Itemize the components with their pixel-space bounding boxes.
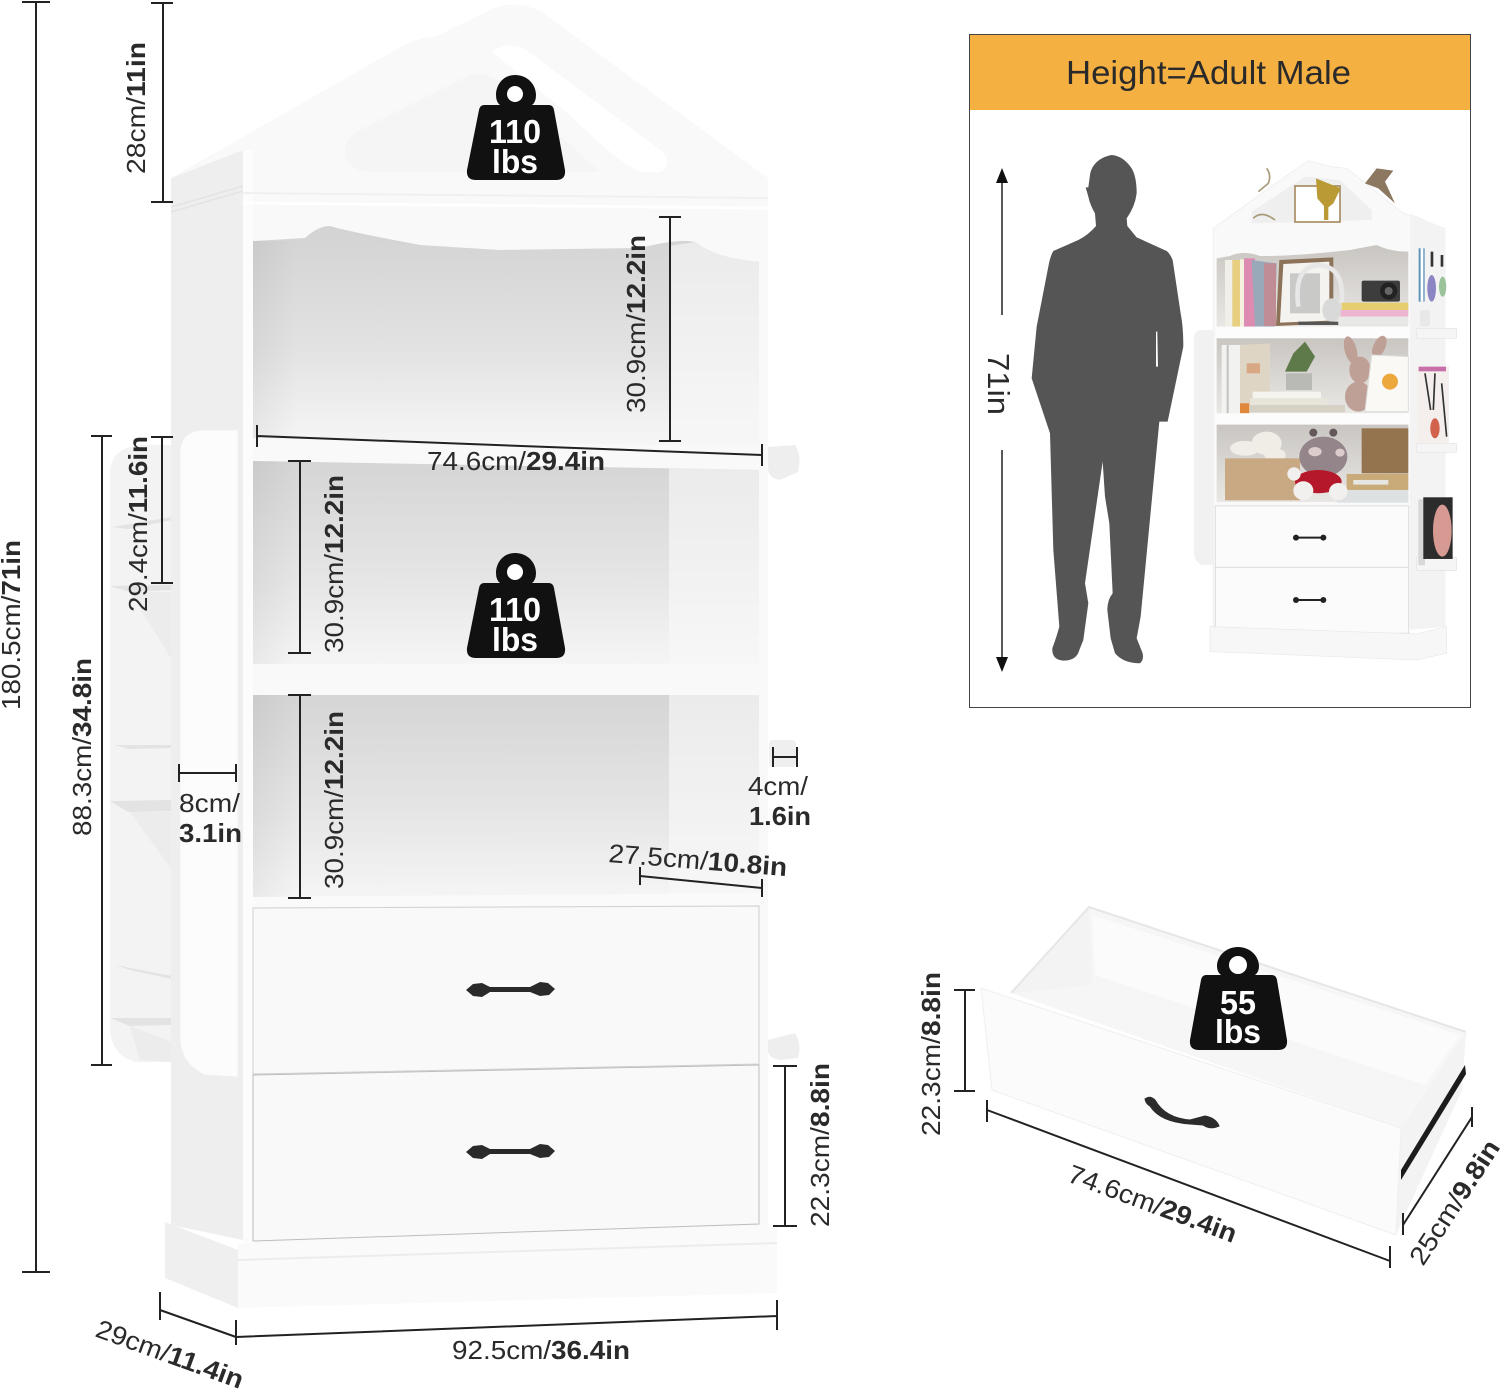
weight badge: 110 lbs shelf: 110 bbox=[489, 591, 541, 628]
dimension: drawer depth: 25cm/9.8in bbox=[1403, 1134, 1500, 1270]
height arrow bbox=[996, 168, 1008, 672]
mini cabinet body bbox=[1213, 161, 1445, 627]
dimension: side panel height bbox=[67, 436, 112, 1065]
right side ledge middle bbox=[769, 740, 796, 767]
dimension: overall width: 92.5cm/ 36.4in bbox=[452, 1335, 630, 1365]
dimension: middle shelf height bbox=[288, 461, 349, 653]
drawer right side bbox=[1396, 1032, 1466, 1235]
mini upper drawer bbox=[1215, 506, 1409, 570]
lower shelf bottom board bbox=[253, 893, 759, 907]
front of cabinet with roof bbox=[171, 4, 768, 1248]
mini bunny toy bbox=[1341, 334, 1390, 412]
mini photo frame bbox=[1276, 257, 1333, 326]
weight badge: 110 lbs shelf: lbs bbox=[492, 621, 538, 658]
dimension: side compartment height: 29.4cm/11.6in bbox=[123, 436, 153, 612]
mini shelf two bbox=[1216, 413, 1410, 424]
mini side record bbox=[1418, 497, 1453, 565]
mini base bbox=[1210, 627, 1447, 660]
mini potted plant bbox=[1285, 342, 1315, 390]
lower shelf opening bbox=[253, 695, 759, 897]
mini camera bbox=[1362, 281, 1400, 302]
weight badge: 55 lbs: 55 bbox=[1220, 984, 1256, 1021]
dimension: drawer width: 74.6cm/29.4in bbox=[1064, 1159, 1241, 1249]
mini headphones bbox=[1297, 265, 1342, 325]
middle shelf opening bbox=[253, 461, 759, 664]
mini book stack bbox=[1338, 303, 1408, 324]
panel frame bbox=[970, 34, 1470, 708]
panel: height comparison bbox=[970, 34, 1470, 708]
top opening right wall bbox=[669, 242, 759, 447]
mini hippo toy bbox=[1287, 429, 1348, 500]
drawer interior bbox=[1011, 907, 1466, 1128]
middle opening right wall bbox=[669, 468, 759, 664]
weight badge: 110 lbs shelf bbox=[467, 553, 565, 658]
mini side art book bbox=[1417, 367, 1449, 443]
roof window bbox=[492, 45, 667, 172]
mini woven basket bbox=[1225, 458, 1300, 500]
dimension: drawer height bbox=[773, 1063, 835, 1227]
drawer slide rail bbox=[1401, 1065, 1466, 1180]
mini shelf one bbox=[1216, 327, 1410, 338]
upper drawer handle bbox=[466, 982, 555, 997]
mini star ornament bbox=[1365, 168, 1395, 203]
dimension: overall width bbox=[236, 1300, 777, 1365]
drawer handle bbox=[1145, 1097, 1219, 1128]
upper drawer bbox=[253, 906, 759, 1074]
mini top opening bbox=[1217, 245, 1408, 327]
dimension: drawer height: 22.3cm/8.8in bbox=[916, 972, 946, 1136]
dimension: lower shelf height: 30.9cm/12.2in bbox=[319, 711, 349, 889]
mini brown box bbox=[1362, 428, 1408, 473]
dimension: side panel depth bbox=[179, 764, 242, 848]
mini roof opening bbox=[1252, 177, 1372, 223]
mini books bbox=[1225, 258, 1277, 327]
left side organizer panel bbox=[110, 445, 182, 1062]
pull-out side panel bbox=[180, 430, 238, 1077]
dimension: drawer height: 22.3cm/8.8in bbox=[805, 1063, 835, 1227]
mini lower drawer bbox=[1215, 567, 1409, 633]
dimension: middle shelf height: 30.9cm/12.2in bbox=[319, 475, 349, 653]
dimension: side panel depth: 8cm/ bbox=[179, 788, 241, 818]
open drawer bbox=[981, 907, 1466, 1235]
lower drawer bbox=[253, 1065, 759, 1241]
dimension: side compartment height bbox=[123, 436, 173, 612]
dimension: drawer width bbox=[987, 1100, 1390, 1268]
weight badge: 55 lbs bbox=[1190, 947, 1287, 1050]
dimension: side panel depth: 3.1in bbox=[179, 818, 242, 848]
lower drawer handle bbox=[466, 1144, 555, 1159]
dimension: shelf width bbox=[257, 425, 762, 476]
mini right ledges bbox=[1417, 328, 1457, 571]
side of cabinet bbox=[171, 150, 243, 1240]
dimension: roof height: 28cm/11in bbox=[121, 42, 151, 174]
mini art frame bbox=[1365, 355, 1408, 412]
mini trophy and photo frame bbox=[1295, 178, 1341, 222]
mini lower handle bbox=[1293, 597, 1326, 603]
mini paper stack bbox=[1250, 392, 1345, 412]
dimension: lower shelf height bbox=[288, 695, 349, 898]
drawer front bbox=[981, 988, 1401, 1235]
mini upright books bbox=[1222, 343, 1270, 413]
mini side bookmarks and keys bbox=[1419, 248, 1446, 327]
mini middle opening bbox=[1217, 338, 1408, 413]
lower opening left shade bbox=[253, 695, 298, 897]
weight badge: 110 lbs roof bbox=[467, 75, 565, 180]
right side ledge top bbox=[768, 445, 799, 480]
mini upper handle bbox=[1293, 535, 1326, 541]
middle opening left shade bbox=[253, 461, 298, 664]
main bookcase bbox=[110, 4, 799, 1308]
mini hanging ornament bbox=[1253, 168, 1275, 220]
lower opening right wall bbox=[669, 695, 759, 897]
middle shelf board bbox=[253, 664, 759, 695]
dimension: overall depth: 29cm/11.4in bbox=[92, 1313, 248, 1392]
mini teddy bear bbox=[1230, 432, 1286, 462]
weight badge: 110 lbs roof: 110 bbox=[489, 113, 541, 150]
base plinth front bbox=[238, 1226, 777, 1308]
mini lower opening bbox=[1217, 425, 1408, 502]
dimension: shelf depth: 27.5cm/10.8in bbox=[608, 838, 788, 882]
dimension: top shelf height: 30.9cm/12.2in bbox=[621, 235, 651, 413]
base plinth side bbox=[165, 1222, 238, 1308]
front post highlight bbox=[243, 150, 253, 1245]
icon: adult male silhouette bbox=[1032, 155, 1183, 663]
mini side panel bbox=[1194, 330, 1217, 565]
dimension: total height bbox=[0, 2, 50, 1272]
top shelf board bbox=[253, 438, 759, 470]
dimension: drawer height bbox=[916, 972, 975, 1136]
dimension: top shelf height bbox=[621, 217, 681, 441]
top moulding line bbox=[243, 193, 768, 198]
dimension: shelf width: 74.6cm/ 29.4in bbox=[427, 446, 605, 476]
weight badge: 110 lbs roof: lbs bbox=[492, 143, 538, 180]
panel header bbox=[970, 35, 1470, 110]
panel heading: Height=Adult Male bbox=[1066, 54, 1351, 91]
right side ledge bottom bbox=[768, 1033, 799, 1060]
dimension: side panel height: 88.3cm/34.8in bbox=[67, 658, 97, 836]
height label: 71in bbox=[981, 353, 1016, 415]
dimension: ledge width: 4cm/ bbox=[748, 771, 809, 801]
dimension: ledge width bbox=[748, 747, 811, 831]
top opening left shade bbox=[253, 241, 298, 446]
dimension: roof height bbox=[121, 3, 173, 202]
dimension: ledge width: 1.6in bbox=[749, 801, 811, 831]
top shelf opening bbox=[253, 226, 759, 447]
weight badge: 55 lbs: lbs bbox=[1215, 1013, 1261, 1050]
mini bookcase photo bbox=[1194, 161, 1457, 660]
